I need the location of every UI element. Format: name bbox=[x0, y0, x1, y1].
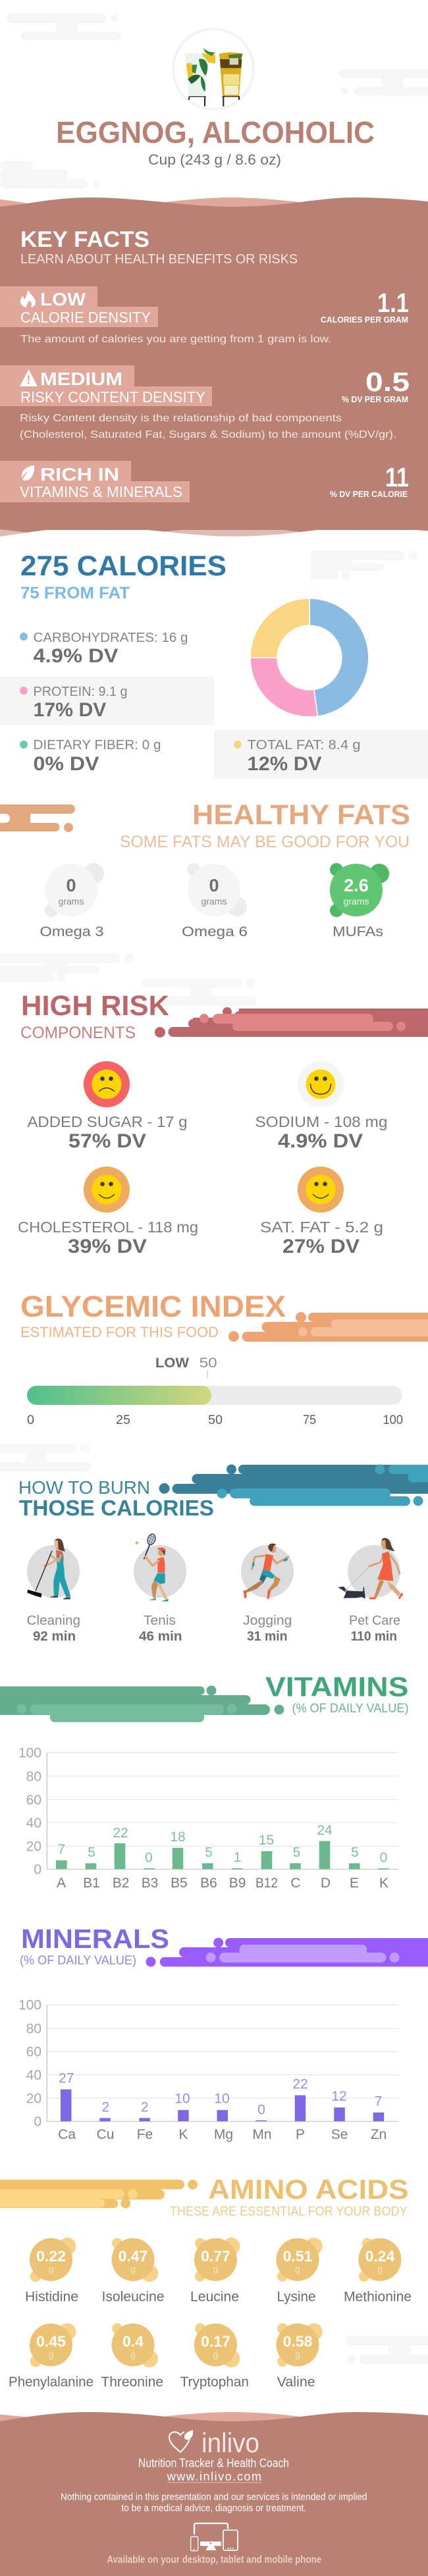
bar chart: minerals: 80 bbox=[26, 2021, 41, 2037]
stat: omega 6: grams bbox=[201, 896, 227, 907]
bar chart: minerals: Ca bbox=[58, 2127, 76, 2142]
fact: medium risky content density: Risky Content density is the relationship of bad components bbox=[20, 413, 342, 424]
logo: inlivo wordmark: inlivo bbox=[201, 2427, 259, 2458]
amino: histidine: g bbox=[49, 2263, 53, 2274]
amino: phenylalanine: Phenylalanine bbox=[9, 2375, 94, 2390]
fact: medium risky content density: % DV PER GRAM bbox=[342, 395, 408, 404]
gauge scale: 0 bbox=[27, 1413, 34, 1427]
activity: pet care bbox=[338, 1538, 404, 1644]
bar chart: minerals: Fe bbox=[137, 2127, 153, 2142]
item: saturated fat: SAT. FAT - 5.2 g bbox=[260, 1219, 383, 1236]
amino: methionine: Methionine bbox=[344, 2289, 412, 2304]
stat: omega 6: Omega 6 bbox=[182, 924, 248, 939]
amino: leucine: 0.77 bbox=[201, 2247, 230, 2265]
subheading: (% OF DAILY VALUE) bbox=[292, 1702, 408, 1716]
icon: person walking dog bbox=[338, 1538, 404, 1599]
activity: tennis bbox=[134, 1533, 186, 1644]
decorative cloud: mid left bbox=[0, 161, 100, 188]
activity: cleaning: 92 min bbox=[33, 1629, 76, 1644]
amino: threonine: g bbox=[130, 2349, 136, 2359]
icon: person sweeping bbox=[27, 1538, 70, 1599]
decorative cloud: top left bbox=[7, 13, 121, 40]
amino: phenylalanine: 0.45 bbox=[36, 2333, 66, 2350]
item: sodium: 4.9% DV bbox=[278, 1130, 363, 1152]
amino: isoleucine: 0.47 bbox=[119, 2247, 147, 2265]
bar chart: minerals: 10 bbox=[174, 2091, 190, 2107]
footer background with waves bbox=[0, 2412, 428, 2576]
heading: key facts: KEY FACTS bbox=[20, 227, 149, 252]
gauge scale bbox=[27, 1413, 403, 1427]
amino: leucine: Leucine bbox=[190, 2289, 239, 2304]
amino: tryptophan: Tryptophan bbox=[180, 2375, 249, 2390]
amino: methionine bbox=[344, 2238, 412, 2304]
fact: rich in vitamins and minerals: VITAMINS & MINERALS bbox=[20, 483, 182, 500]
bar chart: vitamins: 40 bbox=[26, 1816, 41, 1831]
icon: happy face bbox=[298, 1061, 344, 1107]
bar chart: vitamins: B5 bbox=[171, 1876, 188, 1891]
bar chart: vitamins: 5 bbox=[205, 1845, 213, 1860]
fact: low calorie density: The amount of calories you are getting from 1 gram is low. bbox=[20, 334, 331, 345]
bar chart: vitamins: 20 bbox=[26, 1839, 41, 1854]
macro: carbohydrates bbox=[20, 631, 188, 667]
amino: threonine: 0.4 bbox=[122, 2333, 144, 2350]
bar chart: minerals: 60 bbox=[26, 2045, 41, 2059]
macro: total fat bbox=[214, 730, 428, 779]
item: cholesterol bbox=[18, 1167, 198, 1257]
item: cholesterol: CHOLESTEROL - 118 mg bbox=[18, 1219, 198, 1236]
decorative cloud: burn bbox=[0, 1444, 92, 1471]
decorative cloud: calories bbox=[311, 551, 417, 580]
panel: key facts bbox=[0, 197, 428, 537]
decorative banner: burn bbox=[159, 1464, 428, 1506]
item: sodium bbox=[255, 1061, 387, 1152]
fact: low calorie density: CALORIES PER GRAM bbox=[321, 315, 408, 325]
bar chart: vitamins: 60 bbox=[26, 1793, 41, 1808]
activity: cleaning: Cleaning bbox=[27, 1614, 80, 1628]
bar chart: minerals: 2 bbox=[141, 2099, 149, 2115]
amino: methionine: g bbox=[377, 2263, 383, 2274]
bar chart: minerals bbox=[18, 1997, 398, 2142]
macro: protein bbox=[0, 677, 214, 725]
amino: threonine: Threonine bbox=[101, 2375, 163, 2390]
tagline: Nutrition Tracker & Health Coach bbox=[138, 2456, 289, 2469]
activity: pet care: 110 min bbox=[351, 1629, 397, 1644]
amino: isoleucine: Isoleucine bbox=[101, 2289, 165, 2304]
disclaimer bbox=[61, 2491, 367, 2513]
title: EGGNOG, ALCOHOLIC bbox=[56, 115, 375, 149]
gauge scale: 100 bbox=[383, 1413, 403, 1427]
panel: calories bbox=[0, 550, 428, 779]
decorative cloud: amino right bbox=[345, 2336, 428, 2364]
bar chart: vitamins: 5 bbox=[351, 1845, 359, 1860]
amino: valine: 0.58 bbox=[283, 2333, 313, 2350]
amino: leucine bbox=[190, 2238, 240, 2304]
amino: valine: g bbox=[295, 2349, 300, 2359]
amino: valine bbox=[277, 2323, 323, 2390]
bar chart: vitamins: 15 bbox=[259, 1833, 274, 1848]
bar chart: vitamins: 7 bbox=[57, 1842, 65, 1857]
decorative banner: high risk bbox=[155, 1007, 428, 1038]
bar chart: vitamins: B9 bbox=[229, 1876, 246, 1891]
bar chart: vitamins: 22 bbox=[113, 1826, 128, 1841]
stat: omega 3: grams bbox=[59, 896, 84, 907]
bar chart: minerals: K bbox=[178, 2127, 188, 2142]
amino: lysine: Lysine bbox=[277, 2289, 316, 2304]
bar chart: vitamins: E bbox=[350, 1876, 359, 1891]
macro: dietary fiber bbox=[20, 738, 161, 775]
panel: high risk bbox=[18, 990, 428, 1257]
fact: low calorie density: CALORIE DENSITY bbox=[20, 309, 151, 326]
logo: inlivo heart mark bbox=[169, 2431, 193, 2452]
bar chart: vitamins: 5 bbox=[88, 1845, 95, 1860]
subheading: THESE ARE ESSENTIAL FOR YOUR BODY bbox=[170, 2205, 407, 2219]
amino: tryptophan: g bbox=[213, 2349, 218, 2359]
fact: medium risky content density: MEDIUM bbox=[40, 369, 122, 389]
activity: jogging: Jogging bbox=[243, 1614, 292, 1628]
bar chart: minerals: Mg bbox=[214, 2127, 233, 2142]
disclaimer: Nothing contained in this presentation and our services is intended or implied bbox=[61, 2491, 367, 2503]
bar chart: vitamins: 5 bbox=[293, 1845, 300, 1860]
macro: dietary fiber: 0% DV bbox=[33, 753, 99, 775]
bar chart: vitamins: 18 bbox=[170, 1829, 186, 1845]
activity: pet care: Pet Care bbox=[349, 1614, 400, 1628]
bar chart: minerals: 22 bbox=[292, 2076, 308, 2091]
amino: lysine: 0.51 bbox=[283, 2247, 313, 2265]
bar chart: vitamins: 0 bbox=[380, 1851, 387, 1866]
bar chart: vitamins: C bbox=[290, 1876, 301, 1891]
availability note: Available on your desktop, tablet and mobile phone bbox=[107, 2554, 321, 2565]
bar chart: vitamins: 100 bbox=[18, 1746, 41, 1760]
heading: healthy fats: HEALTHY FATS bbox=[192, 799, 410, 831]
macro: carbohydrates: CARBOHYDRATES: 16 g bbox=[33, 631, 188, 645]
amino: phenylalanine bbox=[9, 2323, 94, 2390]
subheading: components: COMPONENTS bbox=[20, 1024, 136, 1042]
amino: isoleucine bbox=[101, 2238, 165, 2304]
disclaimer: to be a medical advice, diagnosis or treatment. bbox=[121, 2502, 306, 2513]
heading: calories: 275 CALORIES bbox=[20, 550, 227, 582]
panel: minerals bbox=[18, 1924, 428, 2142]
bar chart: vitamins: B6 bbox=[200, 1876, 217, 1891]
fact: low calorie density: LOW bbox=[40, 289, 86, 309]
fact: medium risky content density: 0.5 bbox=[365, 367, 410, 397]
amino: isoleucine: g bbox=[130, 2263, 136, 2274]
activity: jogging: 31 min bbox=[247, 1629, 287, 1644]
fact: low calorie density bbox=[0, 286, 409, 345]
decorative banner: minerals bbox=[146, 1938, 428, 1967]
subheading: ESTIMATED FOR THIS FOOD bbox=[20, 1324, 219, 1340]
bar chart: minerals: 0 bbox=[34, 2115, 41, 2129]
bar chart: minerals: Se bbox=[331, 2127, 348, 2142]
icon: tennis player bbox=[136, 1533, 169, 1602]
heading: how to burn: HOW TO BURN bbox=[18, 1477, 150, 1498]
subheading: (% OF DAILY VALUE) bbox=[20, 1954, 136, 1968]
amino: tryptophan: 0.17 bbox=[201, 2333, 230, 2350]
heading: those calories: THOSE CALORIES bbox=[19, 1496, 214, 1520]
item: saturated fat bbox=[260, 1167, 383, 1257]
activity: tennis: 46 min bbox=[139, 1629, 182, 1644]
macro: total fat: TOTAL FAT: 8.4 g bbox=[248, 738, 361, 752]
decorative banner: vitamins bbox=[0, 1685, 284, 1722]
activity: tennis: Tenis bbox=[144, 1614, 176, 1628]
icon: flame bbox=[20, 290, 36, 307]
item: cholesterol: 39% DV bbox=[68, 1236, 147, 1257]
bar chart: minerals: 27 bbox=[59, 2070, 74, 2086]
subheading: LEARN ABOUT HEALTH BENEFITS OR RISKS bbox=[20, 252, 298, 267]
bar chart: vitamins: D bbox=[321, 1876, 331, 1891]
stat: omega 3 bbox=[40, 863, 104, 939]
macro: carbohydrates: 4.9% DV bbox=[33, 645, 119, 667]
decorative banner: amino acids bbox=[0, 2180, 198, 2208]
bar chart: vitamins: 80 bbox=[26, 1770, 41, 1784]
bar chart: minerals: 0 bbox=[257, 2103, 265, 2118]
bar chart: minerals: 100 bbox=[18, 1997, 41, 2013]
item: added sugar: 57% DV bbox=[68, 1130, 146, 1152]
macro: total fat: 12% DV bbox=[248, 753, 321, 775]
heading: amino acids: AMINO ACIDS bbox=[208, 2174, 408, 2205]
panel: healthy fats bbox=[0, 799, 410, 939]
amino: threonine bbox=[101, 2323, 163, 2390]
fact: low calorie density: 1.1 bbox=[377, 288, 409, 318]
gauge scale: 25 bbox=[116, 1413, 130, 1427]
stat: mufas: 2.6 bbox=[344, 876, 369, 895]
stat: omega 6 bbox=[182, 863, 248, 939]
bar chart: vitamins bbox=[18, 1746, 398, 1891]
subheading: SOME FATS MAY BE GOOD FOR YOU bbox=[120, 833, 410, 851]
bar chart: vitamins: 1 bbox=[234, 1850, 241, 1865]
icon: sad face bbox=[84, 1061, 130, 1107]
panel: how to burn those calories bbox=[18, 1464, 428, 1644]
amino: lysine: g bbox=[295, 2263, 300, 2274]
panel: vitamins bbox=[0, 1671, 408, 1891]
decorative clouds: above high risk bbox=[0, 953, 257, 1006]
key facts background with waves bbox=[0, 197, 428, 537]
heading: glycemic index: GLYCEMIC INDEX bbox=[20, 1290, 286, 1323]
bar chart: vitamins: 24 bbox=[317, 1823, 333, 1838]
activity: cleaning bbox=[27, 1538, 80, 1644]
panel: amino acids bbox=[0, 2174, 412, 2390]
stat: mufas bbox=[330, 863, 389, 939]
gauge scale: 50 bbox=[208, 1413, 223, 1427]
bar chart: vitamins: B2 bbox=[113, 1876, 129, 1891]
stat: mufas: MUFAs bbox=[333, 924, 383, 939]
amino: tryptophan bbox=[180, 2323, 249, 2390]
item: sodium: SODIUM - 108 mg bbox=[255, 1113, 387, 1130]
icon: desktop, tablet and phone bbox=[191, 2523, 238, 2551]
bar chart: vitamins: 0 bbox=[34, 1862, 41, 1878]
bar chart: minerals: 2 bbox=[102, 2099, 109, 2115]
fact: rich in vitamins and minerals: RICH IN bbox=[40, 464, 119, 485]
macro: protein: PROTEIN: 9.1 g bbox=[33, 685, 128, 699]
stat: omega 3: 0 bbox=[66, 876, 76, 895]
amino: histidine: 0.22 bbox=[36, 2247, 66, 2265]
activity: jogging bbox=[241, 1543, 294, 1644]
icon: smiling face bbox=[84, 1167, 130, 1213]
fact: medium risky content density bbox=[0, 365, 410, 440]
bar chart: minerals: Cu bbox=[97, 2127, 114, 2142]
bar chart: vitamins: A bbox=[57, 1876, 66, 1891]
icon: smiling face bbox=[298, 1167, 344, 1213]
amino: histidine: Histidine bbox=[25, 2289, 78, 2304]
fact: rich in vitamins and minerals: % DV PER CALORIE bbox=[330, 490, 408, 499]
bar chart: minerals: 20 bbox=[26, 2091, 41, 2107]
macro: dietary fiber: DIETARY FIBER: 0 g bbox=[33, 738, 161, 752]
stat: omega 6: 0 bbox=[209, 876, 219, 895]
food image: drinks in a circle bbox=[173, 29, 254, 109]
item: saturated fat: 27% DV bbox=[282, 1236, 360, 1257]
fact: medium risky content density: (Cholesterol, Saturated Fat, Sugars & Sodium) to the amount (%DV/gr). bbox=[20, 429, 396, 440]
heading: minerals: MINERALS bbox=[21, 1924, 169, 1954]
bar chart: minerals: Zn bbox=[371, 2127, 387, 2142]
amino: lysine bbox=[277, 2238, 323, 2304]
decorative banner: glycemic bbox=[228, 1312, 428, 1342]
amino: methionine: 0.24 bbox=[365, 2247, 395, 2265]
stat: omega 3: Omega 3 bbox=[40, 924, 104, 939]
gauge scale: 75 bbox=[303, 1413, 316, 1427]
decorative banner: healthy fats bbox=[0, 804, 75, 832]
bar chart: minerals: 10 bbox=[214, 2091, 230, 2107]
amino: valine: Valine bbox=[277, 2375, 315, 2390]
item: added sugar: ADDED SUGAR - 17 g bbox=[28, 1113, 187, 1130]
gauge label: LOW bbox=[155, 1355, 189, 1371]
website: www.inlivo.com bbox=[167, 2470, 261, 2483]
icon: warning triangle bbox=[20, 369, 38, 386]
bar chart: minerals: P bbox=[296, 2127, 305, 2142]
icon: leaf bbox=[22, 465, 34, 481]
bar chart: minerals: 7 bbox=[375, 2093, 382, 2109]
stat: mufas: grams bbox=[344, 896, 369, 907]
bar chart: vitamins: K bbox=[379, 1876, 388, 1891]
bar chart: vitamins: B1 bbox=[83, 1876, 100, 1891]
decorative cloud: top right bbox=[338, 69, 428, 95]
macro: protein: 17% DV bbox=[33, 699, 107, 721]
gauge label: 50 bbox=[200, 1355, 217, 1371]
amino: phenylalanine: g bbox=[49, 2349, 53, 2359]
serving size: Cup (243 g / 8.6 oz) bbox=[148, 151, 281, 168]
amino: histidine bbox=[25, 2238, 78, 2304]
donut chart bbox=[250, 598, 369, 717]
gauge label bbox=[155, 1355, 217, 1378]
item: added sugar bbox=[28, 1061, 187, 1152]
fact: rich in vitamins and minerals bbox=[0, 461, 409, 502]
bar chart: minerals: 12 bbox=[331, 2089, 347, 2104]
fact: rich in vitamins and minerals: 11 bbox=[385, 462, 409, 492]
bar chart: minerals: Mn bbox=[252, 2127, 272, 2142]
gauge bar bbox=[27, 1386, 402, 1405]
heading: high risk: HIGH RISK bbox=[21, 990, 169, 1022]
panel: footer bbox=[0, 2412, 428, 2576]
bar chart: vitamins: B3 bbox=[142, 1876, 158, 1891]
amino: leucine: g bbox=[213, 2263, 218, 2274]
subheading: from fat: 75 FROM FAT bbox=[20, 584, 130, 602]
bar chart: vitamins: 0 bbox=[145, 1851, 153, 1866]
icon: jogger bbox=[243, 1543, 289, 1599]
bar chart: vitamins: B12 bbox=[255, 1876, 278, 1891]
heading: vitamins: VITAMINS bbox=[265, 1671, 408, 1702]
panel: glycemic index bbox=[20, 1290, 428, 1427]
fact: medium risky content density: RISKY CONTENT DENSITY bbox=[20, 388, 205, 406]
bar chart: minerals: 40 bbox=[26, 2068, 41, 2083]
